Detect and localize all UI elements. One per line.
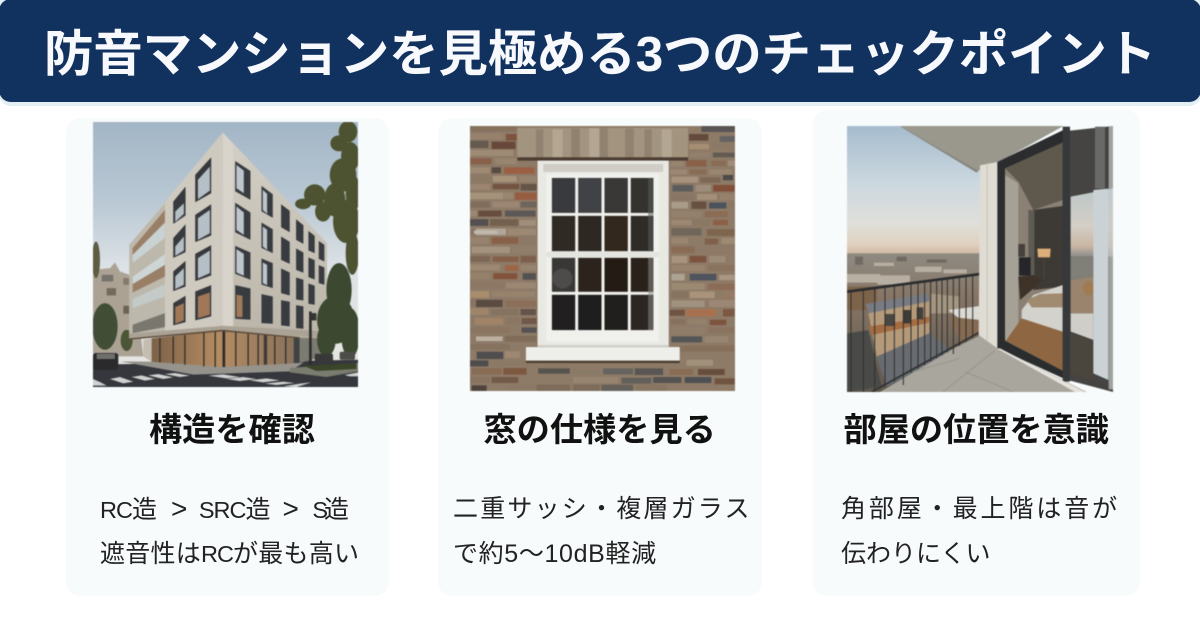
window sill [526,347,680,361]
card 3 body line 2: 伝わりにくい [841,540,991,568]
panel: structure [66,118,389,596]
card 3 heading: 部屋の位置を意識 [844,412,1109,449]
ceiling soffit [900,126,1063,171]
right-face windows [235,161,324,329]
stone lintel [517,128,688,158]
panes [552,178,653,330]
photo: sash window in brick wall [469,125,736,392]
trees and street furniture [295,121,360,275]
bricks [470,126,735,391]
card 1 heading: 構造を確認 [149,412,315,449]
wall pillar [979,162,997,348]
building faces [223,132,327,363]
card 2 body line 2: で約5〜10dB軽減 [453,540,657,568]
window frame [538,161,669,347]
photo: corner balcony with city view [846,125,1114,393]
photo: concrete apartment building [92,121,359,388]
header banner [0,0,1200,106]
crosswalk [93,372,358,387]
room interior [997,130,1063,378]
card 2 body line 1: 二重サッシ・複層ガラス [453,495,752,523]
balcony railing [851,275,973,392]
card 1 body line 2: 遮音性はRCが最も高い [100,540,359,568]
panel: window [438,118,762,596]
card 2 heading: 窓の仕様を見る [484,412,716,449]
balcony floor [880,335,1087,392]
sliding door and reflection [1063,127,1070,382]
left-face windows [173,157,211,325]
panel: room position [813,110,1140,596]
card 3 body line 1: 角部屋・最上階は音が [841,495,1120,523]
building below balcony [865,293,930,314]
title: 防音マンションを見極める3つのチェックポイント [44,27,1156,82]
card 1 body line 1: RC造 > SRC造 > S造 [100,493,349,524]
ground floor [152,330,300,367]
